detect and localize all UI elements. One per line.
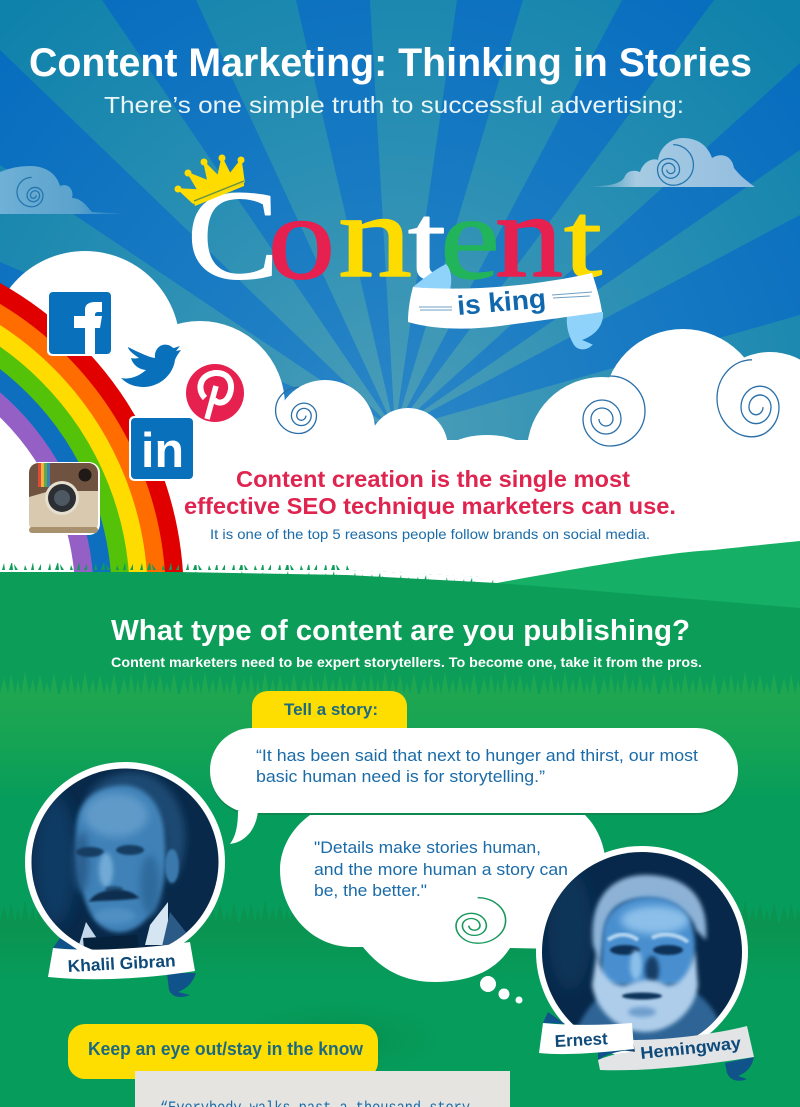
speech bubble: Gibran quote: basic human need is for storytelling.” <box>256 767 545 786</box>
upper meadow band <box>0 670 800 800</box>
ribbon: Khalil Gibran <box>48 938 196 997</box>
title: Content Marketing: Thinking in Stories <box>29 41 752 85</box>
sky background with sun rays <box>0 0 800 600</box>
logo word: Content: n <box>495 169 563 302</box>
white clouds bank <box>0 251 800 600</box>
lower meadow band <box>0 800 800 1107</box>
logo word: Content <box>187 164 602 306</box>
thought bubble: Hemingway quote <box>280 815 610 1004</box>
thought bubble: Hemingway quote: "Details make stories human, <box>314 838 541 857</box>
callout: SEO statement: It is one of the top 5 reasons people follow brands on social media. <box>210 526 650 542</box>
logo word: Content: e <box>440 171 500 304</box>
speech bubble: Gibran quote <box>210 728 738 844</box>
thought bubble: Hemingway quote: be, the better." <box>314 881 427 900</box>
icon: pinterest <box>186 364 244 422</box>
spiral on cloud 3 <box>717 360 779 437</box>
portrait: Ernest Hemingway <box>536 846 748 1058</box>
logo word: Content: C <box>187 164 279 306</box>
portrait: Khalil Gibran <box>25 762 225 962</box>
rainbow <box>0 247 174 945</box>
typewritten paper note <box>135 1071 510 1107</box>
label tab: tell a story <box>252 691 407 732</box>
label: keep an eye out <box>68 1024 378 1079</box>
logo word: Content: n <box>338 169 412 302</box>
section subheading: Content marketers need to be expert storytellers. To become one, take it from the pros. <box>111 655 702 670</box>
ribbon: Khalil Gibran: Khalil Gibran <box>67 951 176 976</box>
ribbon: Ernest Hemingway: Hemingway <box>639 1033 742 1063</box>
ribbon: Ernest Hemingway <box>539 1012 754 1081</box>
icon: facebook <box>47 291 112 356</box>
thought bubble: Hemingway quote: and the more human a story can <box>314 860 568 879</box>
subtitle: There’s one simple truth to successful advertising: <box>104 92 684 118</box>
small cloud right <box>585 138 755 187</box>
logo word: Content: t <box>564 181 602 300</box>
ribbon: is king: is king <box>456 283 547 321</box>
bright green hill <box>497 541 800 620</box>
callout: SEO statement: Content creation is the single most <box>236 466 630 492</box>
spiral on cloud 2 <box>583 376 645 446</box>
callout: SEO statement: effective SEO technique marketers can use. <box>184 493 676 519</box>
ribbon: is king <box>408 264 603 349</box>
icon: linkedin: in <box>141 424 184 478</box>
icon: instagram <box>28 462 100 535</box>
icon: twitter bird <box>121 345 181 387</box>
small cloud left <box>0 166 130 214</box>
grass edge along the horizon <box>0 563 500 588</box>
logo word: Content: t <box>408 183 446 302</box>
label: keep an eye out: Keep an eye out/stay in the know <box>88 1039 364 1059</box>
ribbon: Ernest Hemingway: Ernest <box>554 1029 608 1051</box>
logo word: Content: o <box>268 171 335 304</box>
speech bubble: Gibran quote: “It has been said that next to hunger and thirst, our most <box>256 746 698 765</box>
icon: crown <box>174 154 244 206</box>
spiral on cloud 1 <box>276 387 316 433</box>
icon: linkedin <box>129 416 194 481</box>
callout: SEO statement <box>184 466 676 542</box>
main green ground <box>0 572 800 1107</box>
label tab: tell a story: Tell a story: <box>284 700 378 719</box>
section heading: What type of content are you publishing? <box>111 615 690 647</box>
